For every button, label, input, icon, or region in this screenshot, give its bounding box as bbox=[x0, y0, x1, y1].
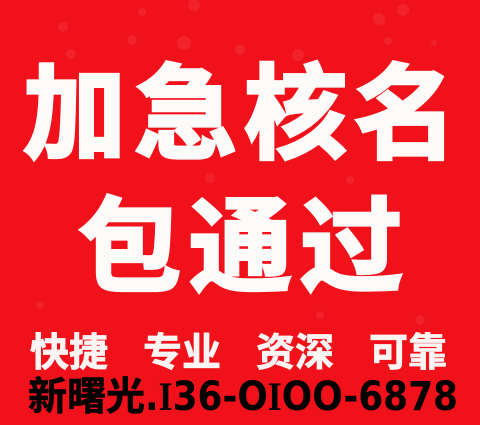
feature words: 可靠 bbox=[369, 332, 447, 375]
contact line: .I36-OIOO-6878 bbox=[145, 374, 458, 420]
title line 1 bbox=[23, 57, 457, 172]
title line 2: 包 bbox=[78, 190, 181, 305]
title line 1: 加 bbox=[23, 57, 126, 172]
feature words: 专业 bbox=[143, 332, 221, 375]
title line 1: 名 bbox=[354, 57, 457, 172]
title line 1: 核 bbox=[244, 57, 347, 172]
title line 2: 过 bbox=[300, 190, 403, 305]
feature words: 快捷 bbox=[30, 332, 108, 375]
bokeh dots bbox=[36, 0, 437, 325]
title line 2 bbox=[78, 190, 403, 305]
contact line: 新曙光 bbox=[28, 376, 145, 419]
title line 2: 通 bbox=[189, 190, 292, 305]
feature words bbox=[30, 332, 447, 375]
title line 1: 急 bbox=[134, 57, 237, 172]
contact line bbox=[28, 374, 458, 420]
feature words: 资深 bbox=[256, 332, 334, 375]
